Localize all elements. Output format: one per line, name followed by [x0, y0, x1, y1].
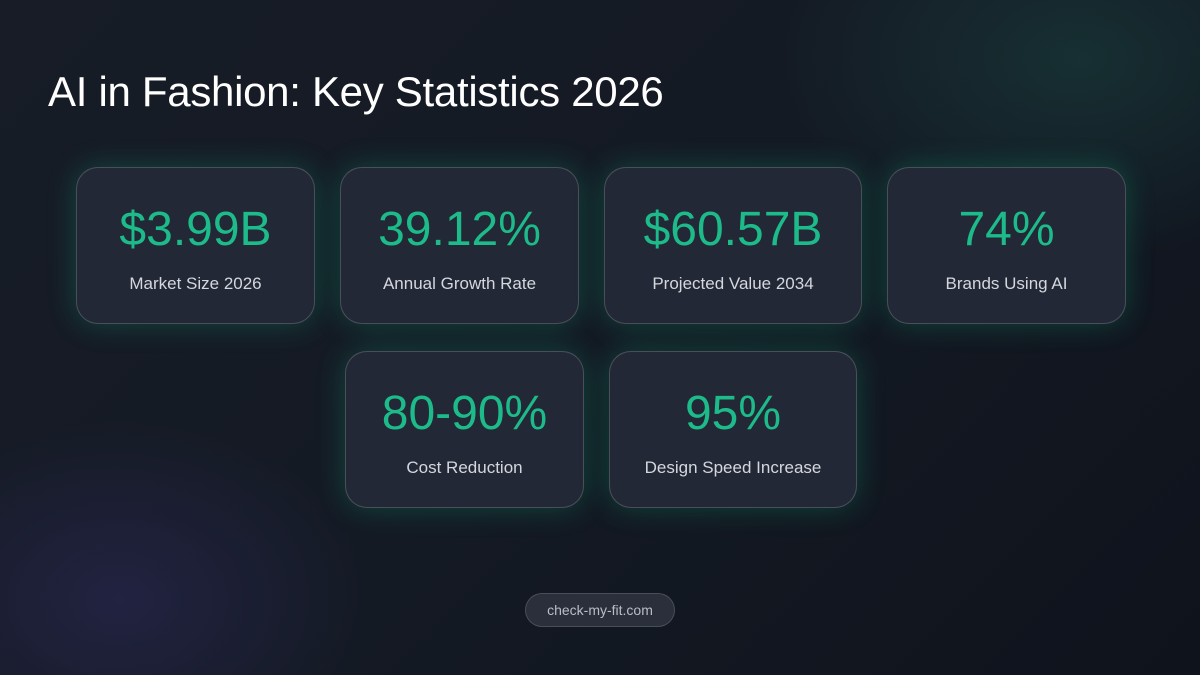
- card: cost reduction: 80-90%: [382, 387, 547, 440]
- footer badge: check-my-fit.com: [547, 602, 653, 618]
- card: projected value: $60.57B: [644, 203, 822, 256]
- card: brands using AI: Brands Using AI: [946, 274, 1067, 293]
- footer badge: [525, 593, 675, 627]
- card: growth rate: Annual Growth Rate: [383, 274, 536, 293]
- card: brands using AI: 74%: [958, 203, 1055, 256]
- card: brands using AI: [887, 167, 1126, 324]
- card: market size: $3.99B: [119, 203, 272, 256]
- card: cost reduction: Cost Reduction: [406, 458, 523, 477]
- title: AI in Fashion: Key Statistics 2026: [48, 68, 663, 115]
- card: design speed: Design Speed Increase: [645, 458, 821, 477]
- card: design speed: [609, 351, 857, 508]
- card: growth rate: 39.12%: [378, 203, 541, 256]
- card: growth rate: [340, 167, 579, 324]
- card: design speed: 95%: [685, 387, 781, 440]
- card: market size: Market Size 2026: [129, 274, 262, 293]
- card: projected value: Projected Value 2034: [652, 274, 814, 293]
- card: market size: [76, 167, 315, 324]
- card: cost reduction: [345, 351, 584, 508]
- card: projected value: [604, 167, 862, 324]
